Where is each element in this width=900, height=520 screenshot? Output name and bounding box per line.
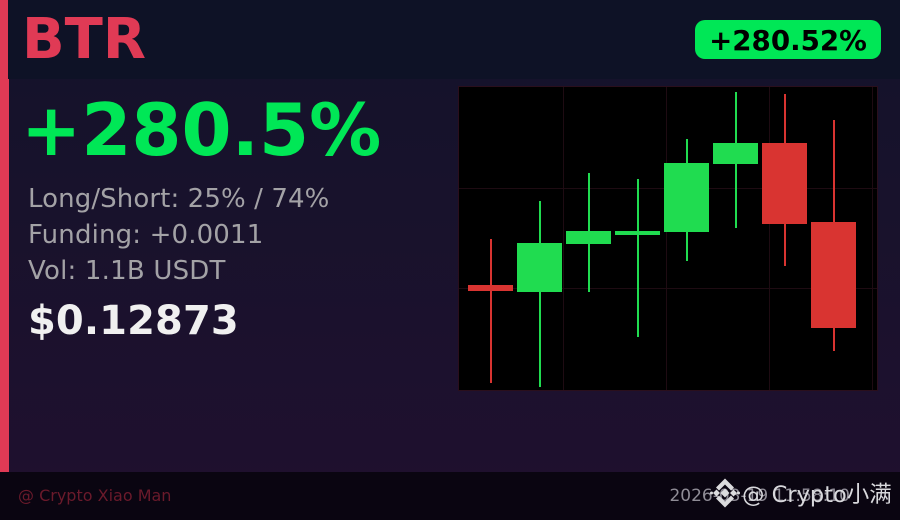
candlestick chart: [458, 86, 878, 391]
footer band: [0, 472, 900, 520]
stat: funding rate: Funding: +0.0011: [28, 220, 263, 250]
footer credit: @ Crypto Xiao Man: [18, 486, 171, 505]
price: $0.12873: [28, 298, 239, 344]
candle 7: [762, 94, 807, 266]
change badge: +280.52%: [709, 24, 867, 57]
icon: diamond logo: [710, 478, 740, 508]
candle 5: [664, 139, 709, 261]
timestamp: 2026-03-19 11:58:10: [669, 486, 850, 506]
watermark: [710, 478, 892, 508]
candle 6: [713, 92, 758, 228]
candle 8: [811, 120, 856, 351]
watermark text: @ Crypto小满: [742, 482, 892, 508]
candle 3: [566, 173, 611, 292]
big percent change: +280.5%: [21, 88, 381, 172]
candle 2: [517, 201, 562, 387]
left accent bar: [0, 0, 9, 472]
stat: long/short ratio: Long/Short: 25% / 74%: [28, 184, 329, 214]
candle 4: [615, 179, 660, 337]
stat: volume: Vol: 1.1B USDT: [28, 256, 226, 286]
header band: [8, 0, 900, 79]
title: ticker: BTR: [22, 7, 146, 72]
candle 1: [468, 239, 513, 383]
